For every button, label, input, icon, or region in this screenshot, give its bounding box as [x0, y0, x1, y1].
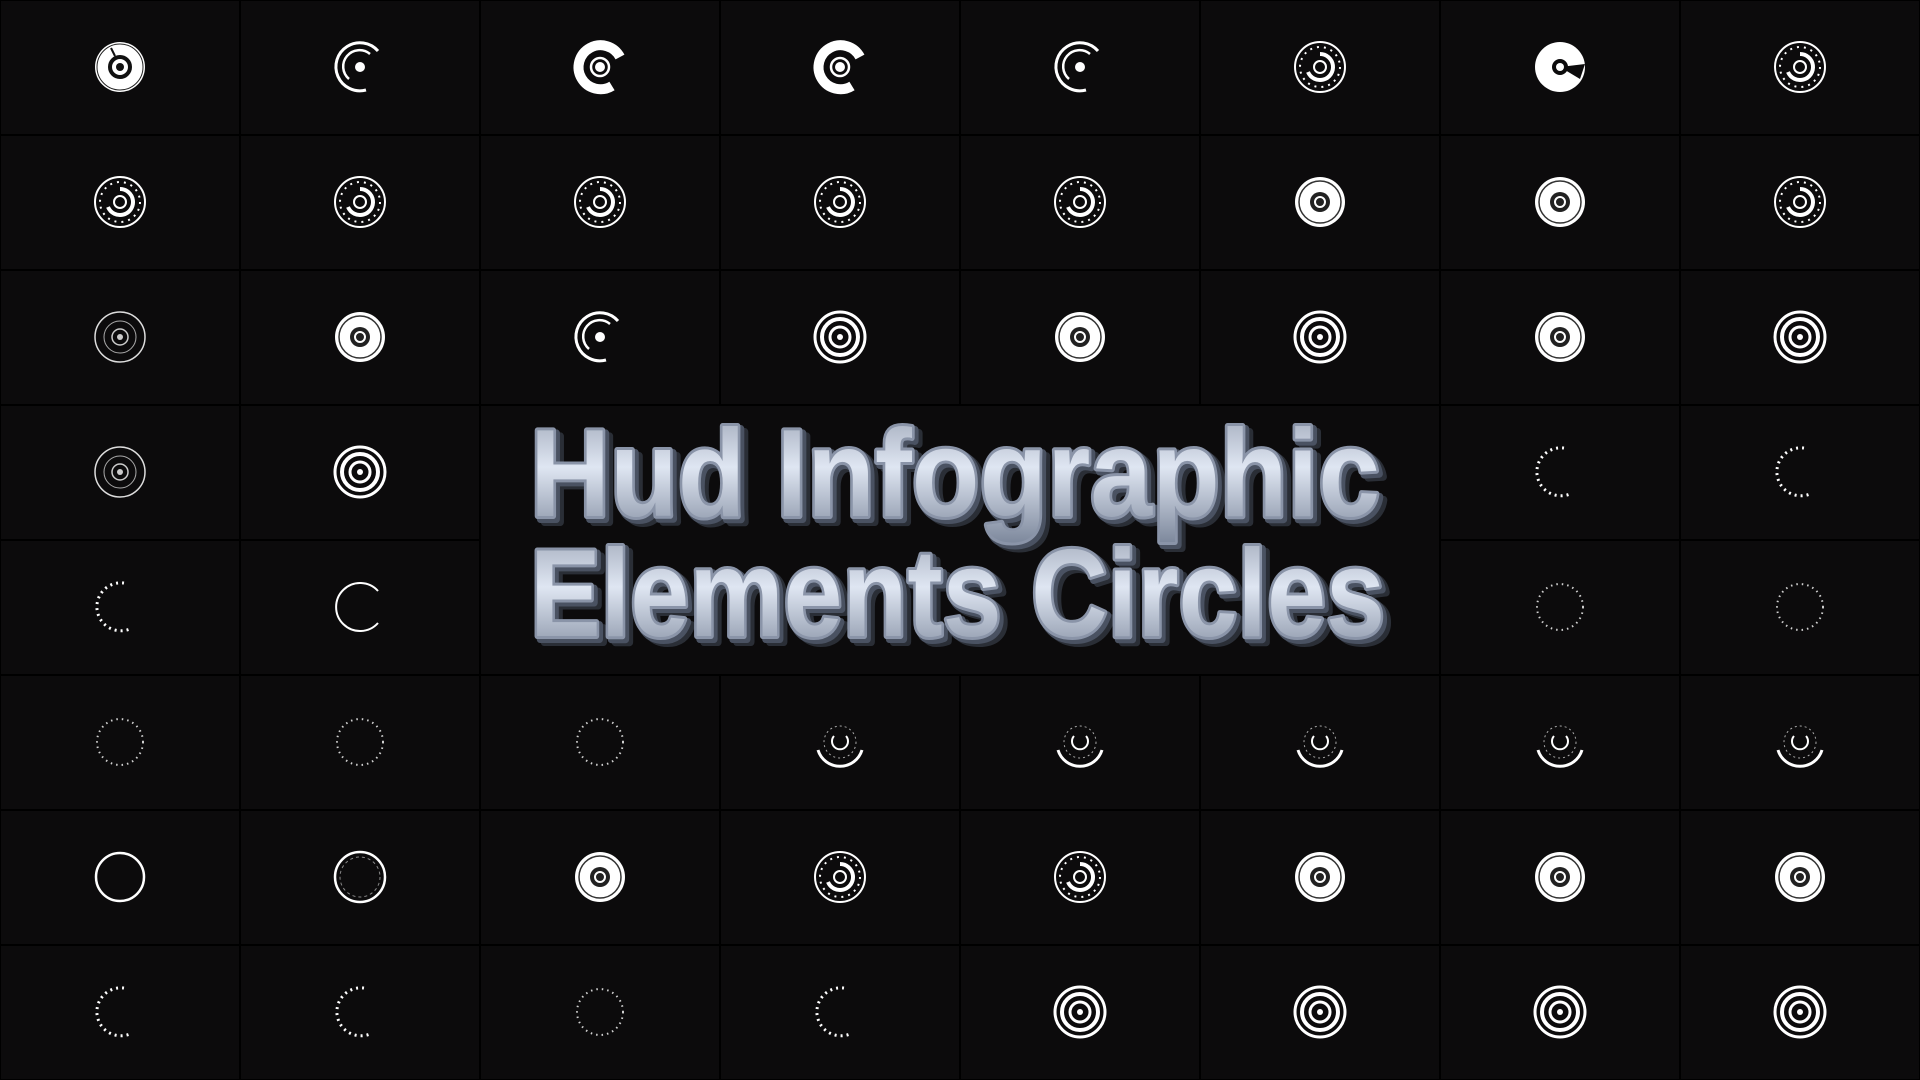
title: Elements Circles — [537, 531, 1392, 669]
row 4 icons — [95, 447, 1810, 497]
title: Elements Circles — [533, 528, 1388, 666]
row 5 icons — [97, 583, 1823, 631]
row 3 icons — [95, 312, 1825, 362]
title: Hud Infographic — [533, 408, 1383, 546]
title: Hud Infographic — [530, 405, 1380, 543]
row 7 icons — [96, 852, 1825, 902]
title: Hud Infographic — [537, 411, 1387, 549]
row 2 icons — [95, 177, 1825, 227]
title: Elements Circles — [530, 525, 1385, 663]
title — [530, 405, 1392, 669]
row 1 icons — [95, 42, 1825, 92]
row 8 icons — [97, 987, 1825, 1037]
row 6 icons — [97, 719, 1822, 766]
